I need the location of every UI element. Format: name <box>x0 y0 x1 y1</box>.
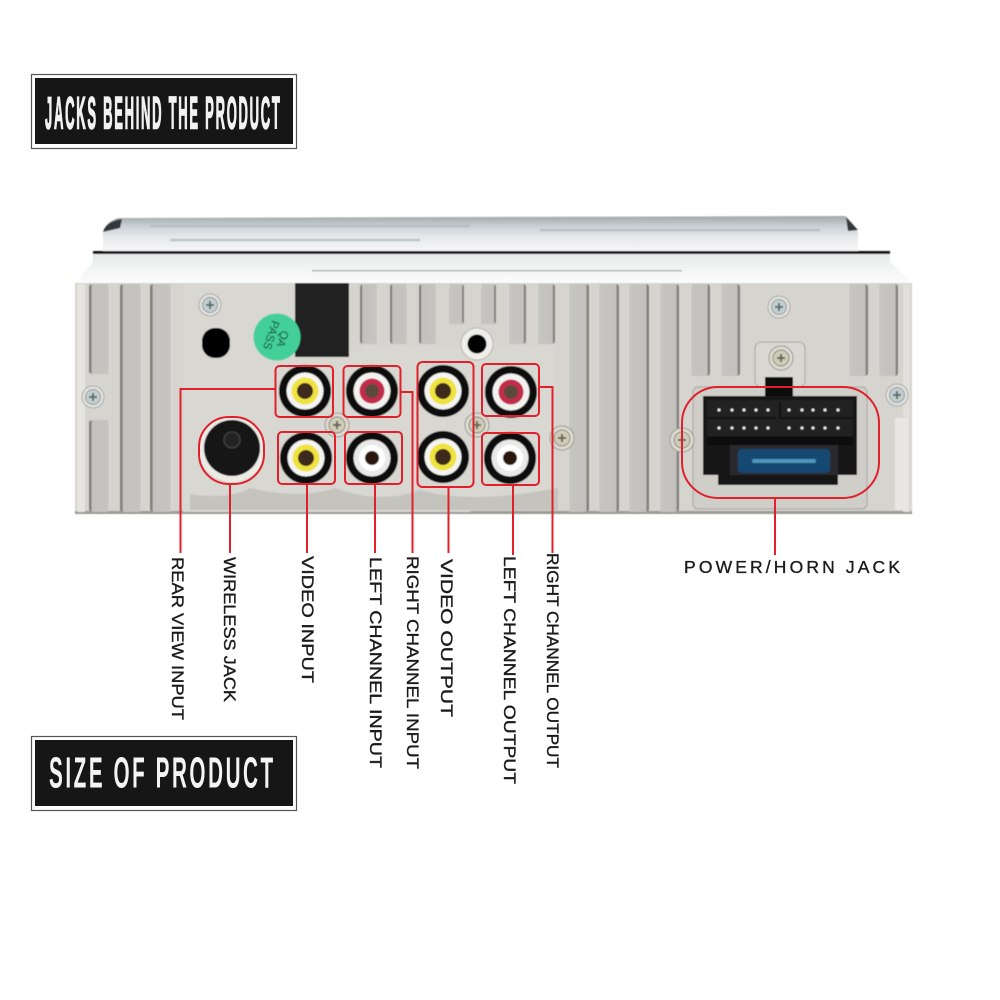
title: size of product: SIZE OF PRODUCT <box>49 749 273 798</box>
ringed hole <box>461 328 493 360</box>
central plate <box>183 284 555 512</box>
vertical jack labels: VIDEO OUTPUT <box>437 559 456 717</box>
title: jacks behind the product: JACKS BEHIND THE PRODUCT <box>45 89 280 139</box>
vertical jack labels: RIGHT CHANNEL OUTPUT <box>543 553 562 768</box>
qa pass sticker: PASS <box>260 319 281 351</box>
rear heat sink panel <box>75 283 912 514</box>
vertical jack labels: VIDEO INPUT <box>298 556 317 683</box>
vertical jack labels: LEFT CHANNEL INPUT <box>366 557 385 768</box>
qa pass sticker: QA <box>273 329 290 349</box>
vertical jack labels: RIGHT CHANNEL INPUT <box>403 556 422 769</box>
vertical jack labels: REAR VIEW INPUT <box>168 557 187 720</box>
right upper fins <box>690 284 710 376</box>
vertical jack labels: LEFT CHANNEL OUTPUT <box>500 556 519 784</box>
vertical jack labels <box>168 553 562 784</box>
connector plate <box>693 387 867 509</box>
left fins <box>77 284 85 512</box>
title: jacks behind the product <box>32 74 296 148</box>
screws <box>82 294 908 452</box>
vertical jack labels: WIRELESS JACK <box>220 557 239 703</box>
qa pass sticker <box>254 314 300 360</box>
upper centre fins <box>360 284 378 344</box>
title: size of product <box>32 736 296 810</box>
red callout frames and leader lines <box>180 362 879 555</box>
mounting hole <box>202 328 230 358</box>
full height fins <box>568 284 589 512</box>
black block <box>295 283 349 357</box>
wireless jack knob <box>199 416 265 482</box>
RCA jacks <box>279 365 537 484</box>
power connector <box>703 377 857 485</box>
label: power/horn jack: POWER/HORN JACK <box>684 557 900 577</box>
product photo: rear of car radio <box>75 216 913 514</box>
top cover slab <box>75 216 913 283</box>
